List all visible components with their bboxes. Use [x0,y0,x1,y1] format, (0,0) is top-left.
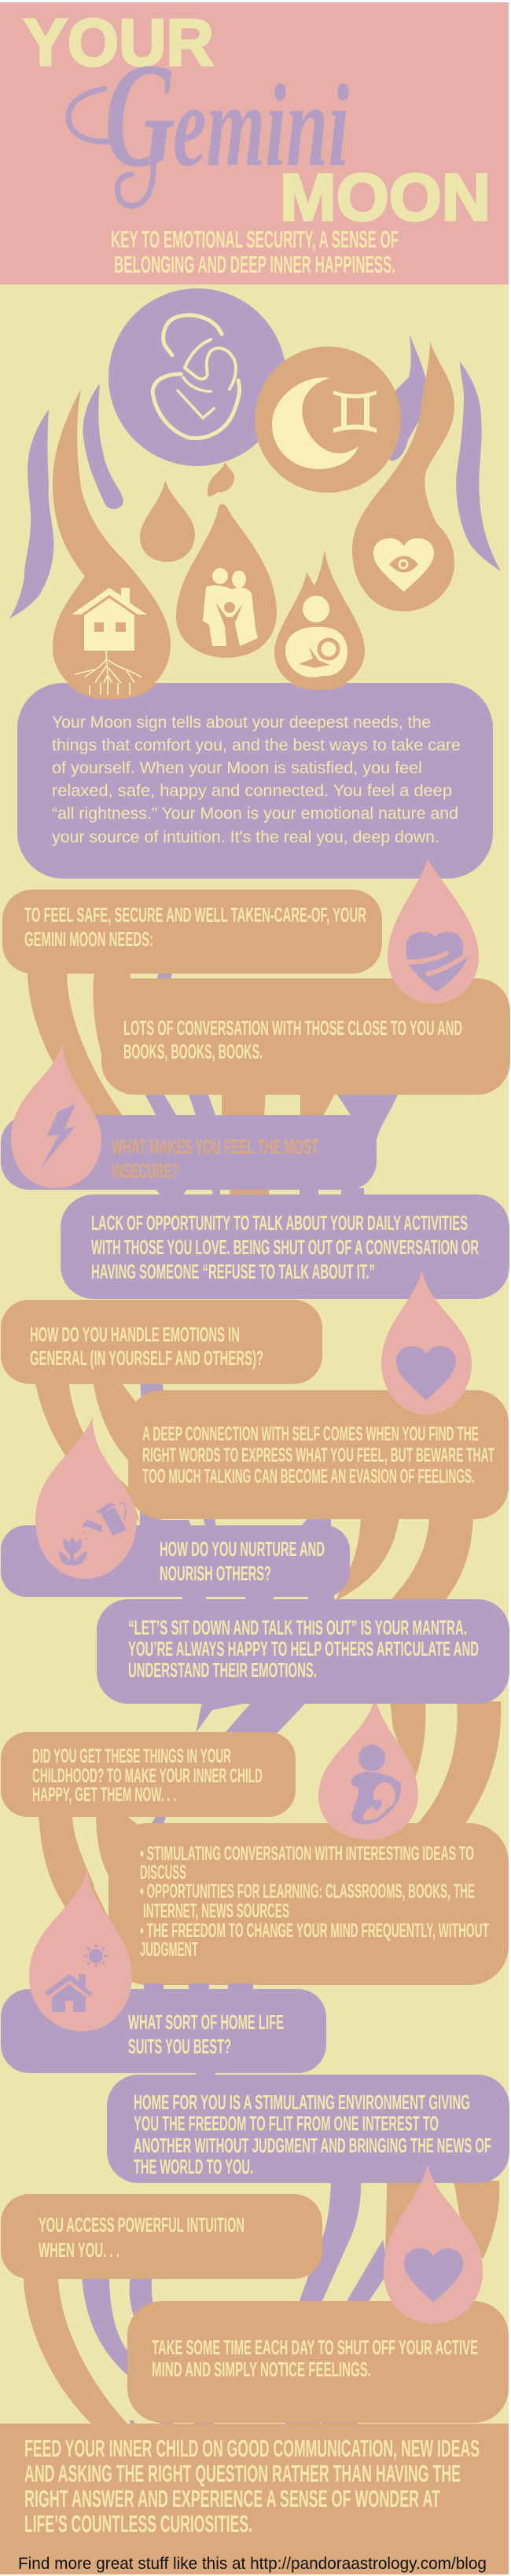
bubble: childhood list: INTERNET, NEWS SOURCES [143,1900,289,1922]
source line: Find more great stuff like this at http://pandoraastrology.com/blog [18,2555,487,2573]
closing message: LIFE’S COUNTLESS CURIOSITIES. [24,2510,252,2537]
drop: mother and baby [318,1697,418,1840]
title: Gemini: emini [173,61,349,191]
drop: sun and house [29,1869,132,2031]
moon and gemini circle [255,347,401,493]
house drop base over panel edge [67,683,157,699]
nursing drop tip over panel edge [291,683,346,690]
intro text [52,714,461,846]
bubble: intuition question: WHEN YOU. . . [39,2238,119,2262]
intro text: “all rightness.” Your Moon is your emotional nature and [52,805,458,823]
header panel [0,2,509,284]
bubble: mantra: UNDERSTAND THEIR EMOTIONS. [128,1658,317,1682]
bubble: intuition question: YOU ACCESS POWERFUL INTUITION [39,2213,244,2237]
bubble: needs question [2,890,382,974]
drop: house with roots [53,388,171,699]
icon: gemini glyph [333,391,377,433]
bubble: needs question: GEMINI MOON NEEDS: [24,927,153,951]
small drop [208,462,234,497]
bubble: intuition question [1,2194,322,2279]
intro text: of yourself. When your Moon is satisfied, you feel [52,759,422,777]
bubble: mantra [97,1599,509,1704]
closing message [24,2435,480,2537]
drop: heart with eye [352,340,454,611]
section 1 connecting ribbons [28,971,399,1196]
main circle: mother and child [108,288,286,466]
section 3 connecting ribbons [39,1701,501,1935]
bubble: childhood question [1,1732,296,1817]
bubble: intuition answer [127,2301,509,2423]
section 5 connecting ribbons [24,2181,499,2425]
drop: family [176,505,277,658]
icon: crescent [272,377,358,469]
bubble: insecure question: WHAT MAKES YOU FEEL THE MOST [112,1135,318,1158]
drop: final heart [384,2164,483,2324]
bubble: needs answer [101,978,510,1095]
bubble: insecure question: INSECURE? [112,1159,178,1183]
bubble: nurture question: NOURISH OTHERS? [160,1561,271,1585]
bubble: home answer [107,2075,509,2183]
subtitle [111,226,399,278]
drop: lightning bolt [11,1044,101,1188]
purple flame shapes [9,334,501,618]
intro text: relaxed, safe, happy and connected. You feel a deep [52,782,452,800]
bubble: childhood list [108,1823,509,1985]
title: Gemini: G [105,33,175,198]
section 2 connecting ribbons [35,1379,473,1601]
intro text: your source of intuition. It's the real you, deep down. [52,828,439,846]
bubble: childhood question: CHILDHOOD? TO MAKE YOUR INNER CHILD [32,1765,263,1787]
bubble: insecure answer [61,1194,509,1299]
bubble: nurture question [1,1525,350,1597]
intro text: Your Moon sign tells about your deepest needs, the [52,714,431,732]
title: Moon: MOON [280,160,491,234]
bubble: emotions question: GENERAL (IN YOURSELF AND OTHERS)? [30,1346,263,1370]
bubble: home question: SUITS YOU BEST? [128,2035,231,2058]
bubble: emotions answer [128,1390,509,1519]
bubble: emotions question: HOW DO YOU HANDLE EMOTIONS IN [30,1323,240,1346]
title: Your: YOUR [24,6,214,79]
section 4 connecting strips [144,1983,253,2076]
intro text: things that comfort you, and the best ways to take care [52,736,461,754]
drop: hugging heart [388,859,479,1004]
bubble: home answer: THE WORLD TO YOU. [134,2155,253,2178]
bubble: insecure question [1,1115,377,1190]
plain tan drop [140,480,195,562]
bubble: childhood list: JUDGMENT [140,1939,198,1961]
bubble: home question [1,1989,326,2073]
bubble: nurture question: HOW DO YOU NURTURE AND [160,1537,325,1561]
drop: nursing [274,550,365,690]
bubble: home question: WHAT SORT OF HOME LIFE [128,2010,284,2034]
intro panel [17,683,493,879]
title: Gemini [68,33,349,206]
bubble: childhood list: DISCUSS [140,1862,186,1884]
bubble: needs answer: BOOKS, BOOKS, BOOKS. [123,1040,263,1063]
drop: watering can and tulip [35,1416,137,1579]
bubble: emotions question [1,1300,322,1384]
drop: heart [381,1270,472,1415]
bubble: childhood question: HAPPY, GET THEM NOW. . . [32,1784,176,1806]
bubble: childhood question: DID YOU GET THESE THINGS IN YOUR [32,1745,231,1767]
footer panel [0,2424,509,2574]
